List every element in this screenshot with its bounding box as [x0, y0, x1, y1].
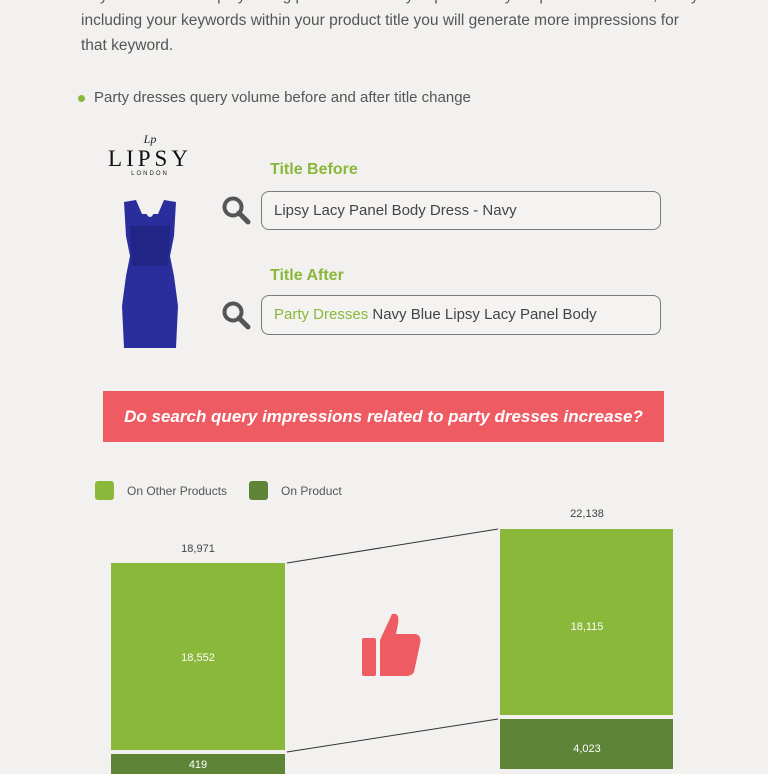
- legend: On Other Products: [127, 484, 227, 498]
- bar: before: 18,552: [181, 652, 215, 664]
- bar: after: 4,023: [573, 743, 601, 755]
- logo: Lipsy London: Lp: [144, 132, 156, 146]
- legend: [95, 481, 342, 500]
- icon: search after: [222, 302, 250, 330]
- Title After heading: Title After: [270, 267, 344, 284]
- intro text: that keyword.: [81, 37, 173, 54]
- icon: search before: [222, 196, 250, 224]
- bar: after: 18,115: [571, 621, 603, 633]
- bar: after: [500, 508, 673, 769]
- search box before: [261, 191, 661, 230]
- logo: Lipsy London: LONDON: [131, 171, 169, 177]
- Title Before heading: Title Before: [270, 161, 358, 178]
- question banner: [103, 391, 664, 442]
- icon: thumbs up: [362, 614, 420, 676]
- bar: after: 22,138: [570, 508, 604, 520]
- intro text: [81, 0, 699, 54]
- question banner: Do search query impressions related to party dresses increase?: [124, 407, 643, 426]
- dress image: [122, 200, 178, 348]
- search box after: Party Dresses Navy Blue Lipsy Lacy Panel Body: [274, 306, 597, 323]
- logo: Lipsy London: LIPSY: [108, 146, 192, 171]
- bar: before: 18,971: [181, 543, 215, 555]
- legend: On Product: [281, 484, 342, 498]
- bullet heading: Party dresses query volume before and after title change: [94, 89, 471, 106]
- logo: Lipsy London: [108, 132, 192, 177]
- search box before: Lipsy Lacy Panel Body Dress - Navy: [274, 202, 517, 219]
- search box after: [261, 295, 661, 335]
- bar: before: 419: [189, 759, 207, 771]
- bar: before: [111, 543, 285, 774]
- intro text: including your keywords within your product title you will generate more impressions for: [81, 12, 679, 29]
